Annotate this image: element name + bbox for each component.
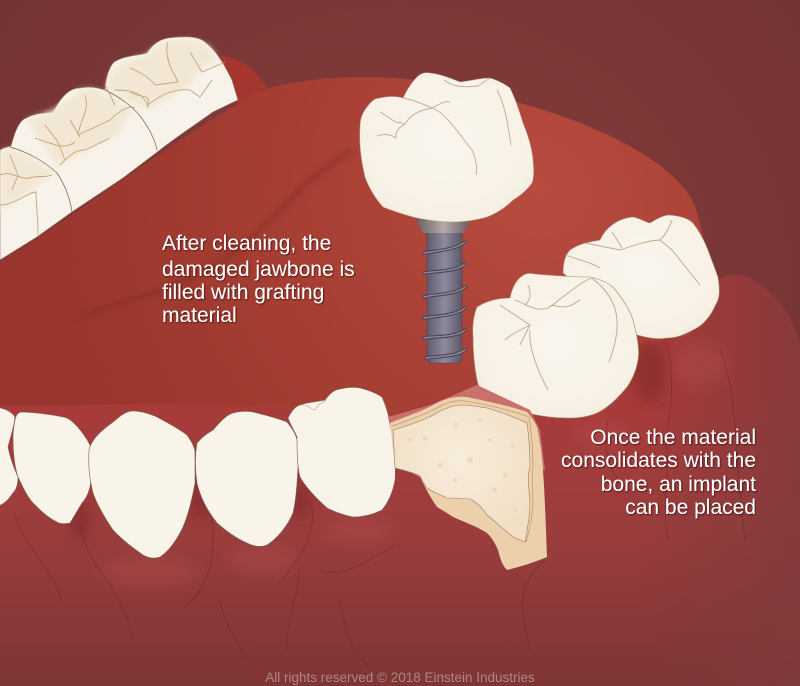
tongue / floor of mouth: [0, 77, 720, 420]
root ridge outlines: [15, 343, 745, 668]
exposed socket with bone graft: [388, 385, 547, 570]
lower gum with tissue: [0, 275, 800, 686]
annotation: consolidation: bone, an implant: [601, 473, 756, 496]
annotation: grafting material: filled with grafting: [162, 281, 324, 304]
lower front teeth: [0, 387, 395, 558]
annotation: consolidation: can be placed: [625, 496, 756, 519]
back upper teeth: [0, 37, 238, 260]
crown: [360, 73, 534, 222]
front molar: [473, 273, 639, 418]
annotation: grafting material: damaged jawbone is: [162, 258, 355, 281]
fissures: [0, 42, 225, 235]
annotation: consolidation: consolidates with the: [561, 449, 756, 472]
gum highlight near teeth: [100, 343, 728, 588]
annotation: grafting material: After cleaning, the: [162, 232, 331, 255]
annotation: grafting material: material: [162, 304, 237, 327]
implant screw: [418, 218, 469, 363]
copyright: All rights reserved © 2018 Einstein Industries: [265, 670, 535, 685]
back molar: [563, 215, 719, 339]
gum shadows between teeth: [70, 342, 666, 540]
occlusal tops: [0, 40, 215, 212]
bone graft filling: [393, 405, 530, 542]
upper back gum: [218, 56, 268, 104]
tooth dividers: [10, 90, 157, 212]
lower right molars: [473, 215, 719, 418]
tongue shadow creases: [78, 152, 350, 318]
annotation: consolidation: Once the material: [590, 426, 756, 449]
